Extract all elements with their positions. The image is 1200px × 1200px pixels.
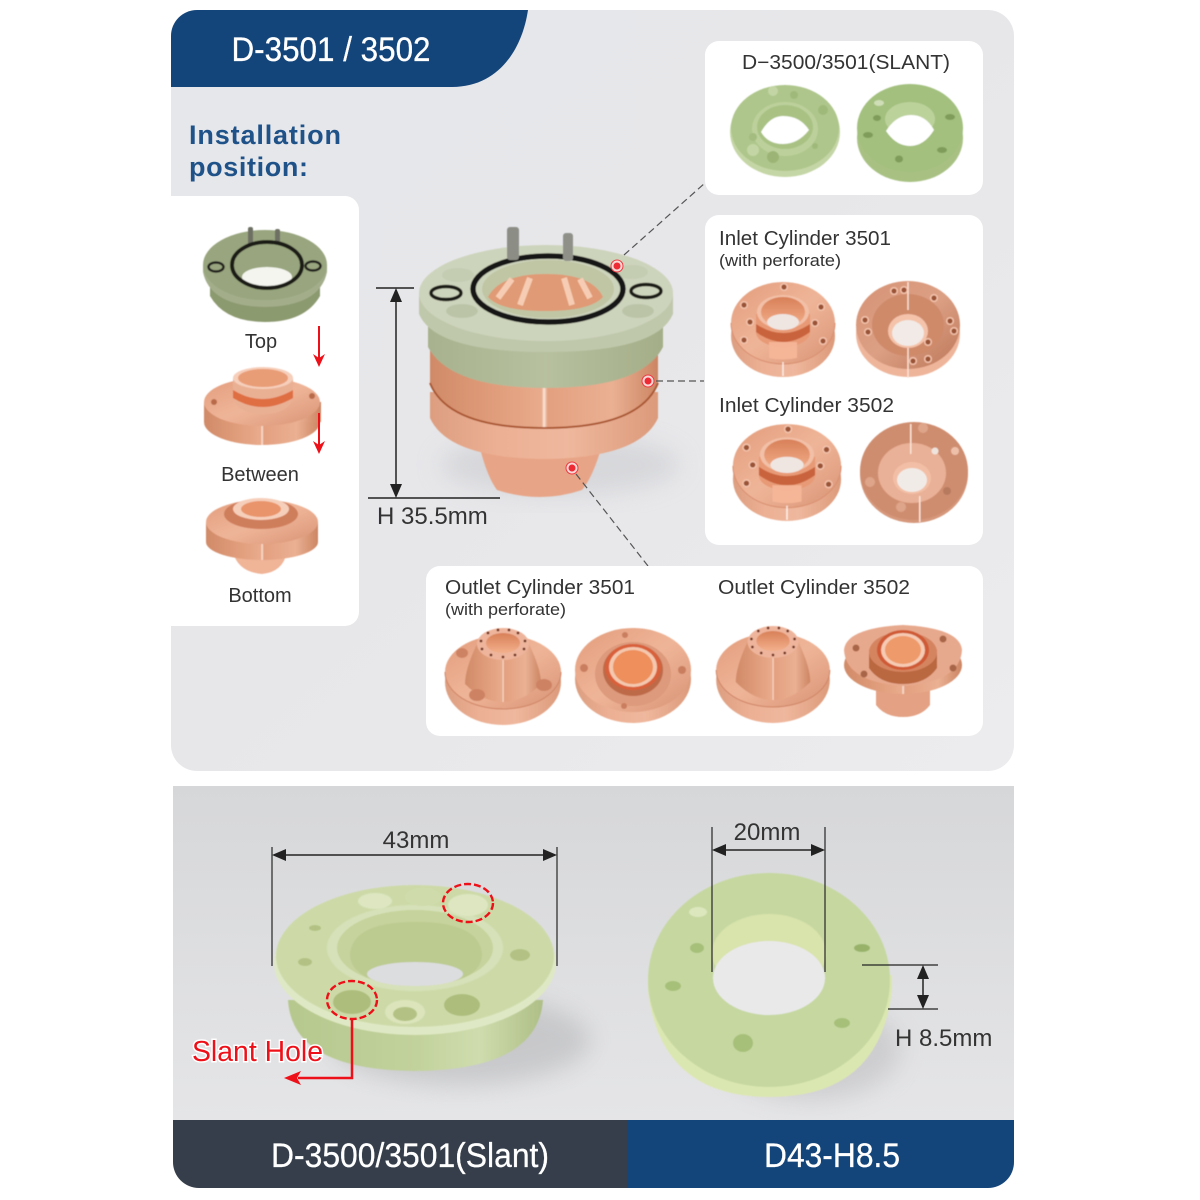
part: outlet 3501 cone — [445, 628, 561, 725]
part: inlet 3501 front — [731, 282, 835, 377]
label: inlet 3501: Inlet Cylinder 3501 — [719, 228, 891, 250]
label: inlet 3501 — [719, 228, 891, 270]
top panel — [171, 10, 1014, 771]
label: top: Top — [245, 331, 277, 353]
part: outlet 3501 ring — [575, 628, 691, 723]
label: outlet 3501 — [445, 577, 635, 619]
part: outlet 3502 cone — [716, 626, 830, 723]
dimension: H 8.5mm — [862, 965, 992, 1052]
part: bottom cylinder — [206, 498, 318, 574]
part: inlet 3502 back — [860, 422, 968, 523]
callout dots — [611, 260, 623, 272]
dimension: 20mm: 20mm — [734, 819, 800, 846]
dimension: height 35.5mm — [368, 288, 500, 530]
part: top insulating ring — [203, 227, 327, 322]
label bar: D-3500/3501(Slant): D-3500/3501(Slant) — [271, 1137, 549, 1175]
label: outlet 3502: Outlet Cylinder 3502 — [718, 577, 910, 599]
pins — [507, 227, 519, 260]
slant hole markers — [327, 884, 493, 1019]
ring: slant view — [274, 885, 590, 1085]
slant hole callout: Slant Hole — [192, 1036, 323, 1068]
ring photo right — [857, 84, 963, 182]
label: outlet 3501: Outlet Cylinder 3501 — [445, 577, 635, 599]
label: inlet 3502: Inlet Cylinder 3502 — [719, 395, 894, 417]
green flange rim — [419, 293, 673, 352]
label: between: Between — [221, 464, 299, 486]
heading: installation position — [189, 120, 341, 182]
label bar: D43-H8.5: D43-H8.5 — [764, 1137, 900, 1175]
label: bottom: Bottom — [228, 585, 292, 607]
lower copper ring — [430, 392, 658, 459]
dashed leader lines — [576, 183, 705, 566]
label: outlet 3501: (with perforate) — [445, 600, 566, 619]
assembly shadow — [440, 435, 680, 495]
title: D−3500/3501(SLANT) — [742, 52, 950, 74]
dimension: height 35.5mm: H 35.5mm — [377, 503, 488, 530]
upper copper ring — [430, 345, 658, 428]
part: between cylinder — [204, 367, 321, 445]
small o-rings — [431, 286, 461, 300]
ring: front view — [648, 873, 900, 1100]
bottom panel — [173, 786, 1014, 1188]
green body — [428, 325, 663, 388]
label: inlet 3501: (with perforate) — [719, 251, 841, 270]
header banner — [171, 10, 528, 87]
nozzle opening — [482, 260, 614, 318]
panel: slant ring — [705, 41, 983, 195]
heading: installation position: Installation — [189, 120, 341, 150]
dimension: 43mm — [272, 827, 557, 966]
lower cone — [481, 452, 600, 497]
label bar: D43-H8.5 — [627, 1120, 1014, 1188]
heading: installation position: position: — [189, 152, 308, 182]
arrow: between to bottom — [313, 413, 325, 454]
ring photo left — [730, 85, 840, 177]
panel: installation stack — [171, 196, 359, 626]
dimension: 20mm — [712, 819, 825, 972]
main assembly photo — [419, 227, 680, 497]
dimension: 43mm: 43mm — [383, 827, 449, 854]
part: outlet 3502 ring — [844, 625, 962, 717]
green top face — [419, 245, 673, 341]
slant hole callout — [192, 1019, 352, 1085]
panel: outlet cylinders — [426, 566, 983, 736]
o-ring — [473, 256, 623, 322]
label bar: D-3500/3501(Slant) — [173, 1120, 627, 1188]
dimension: H 8.5mm: H 8.5mm — [895, 1025, 992, 1052]
panel: inlet cylinders — [705, 215, 983, 545]
arrow: top to between — [313, 326, 325, 367]
header banner: D-3501 / 3502 — [232, 31, 430, 69]
part: inlet 3501 back — [856, 281, 960, 378]
part: inlet 3502 front — [733, 424, 841, 521]
